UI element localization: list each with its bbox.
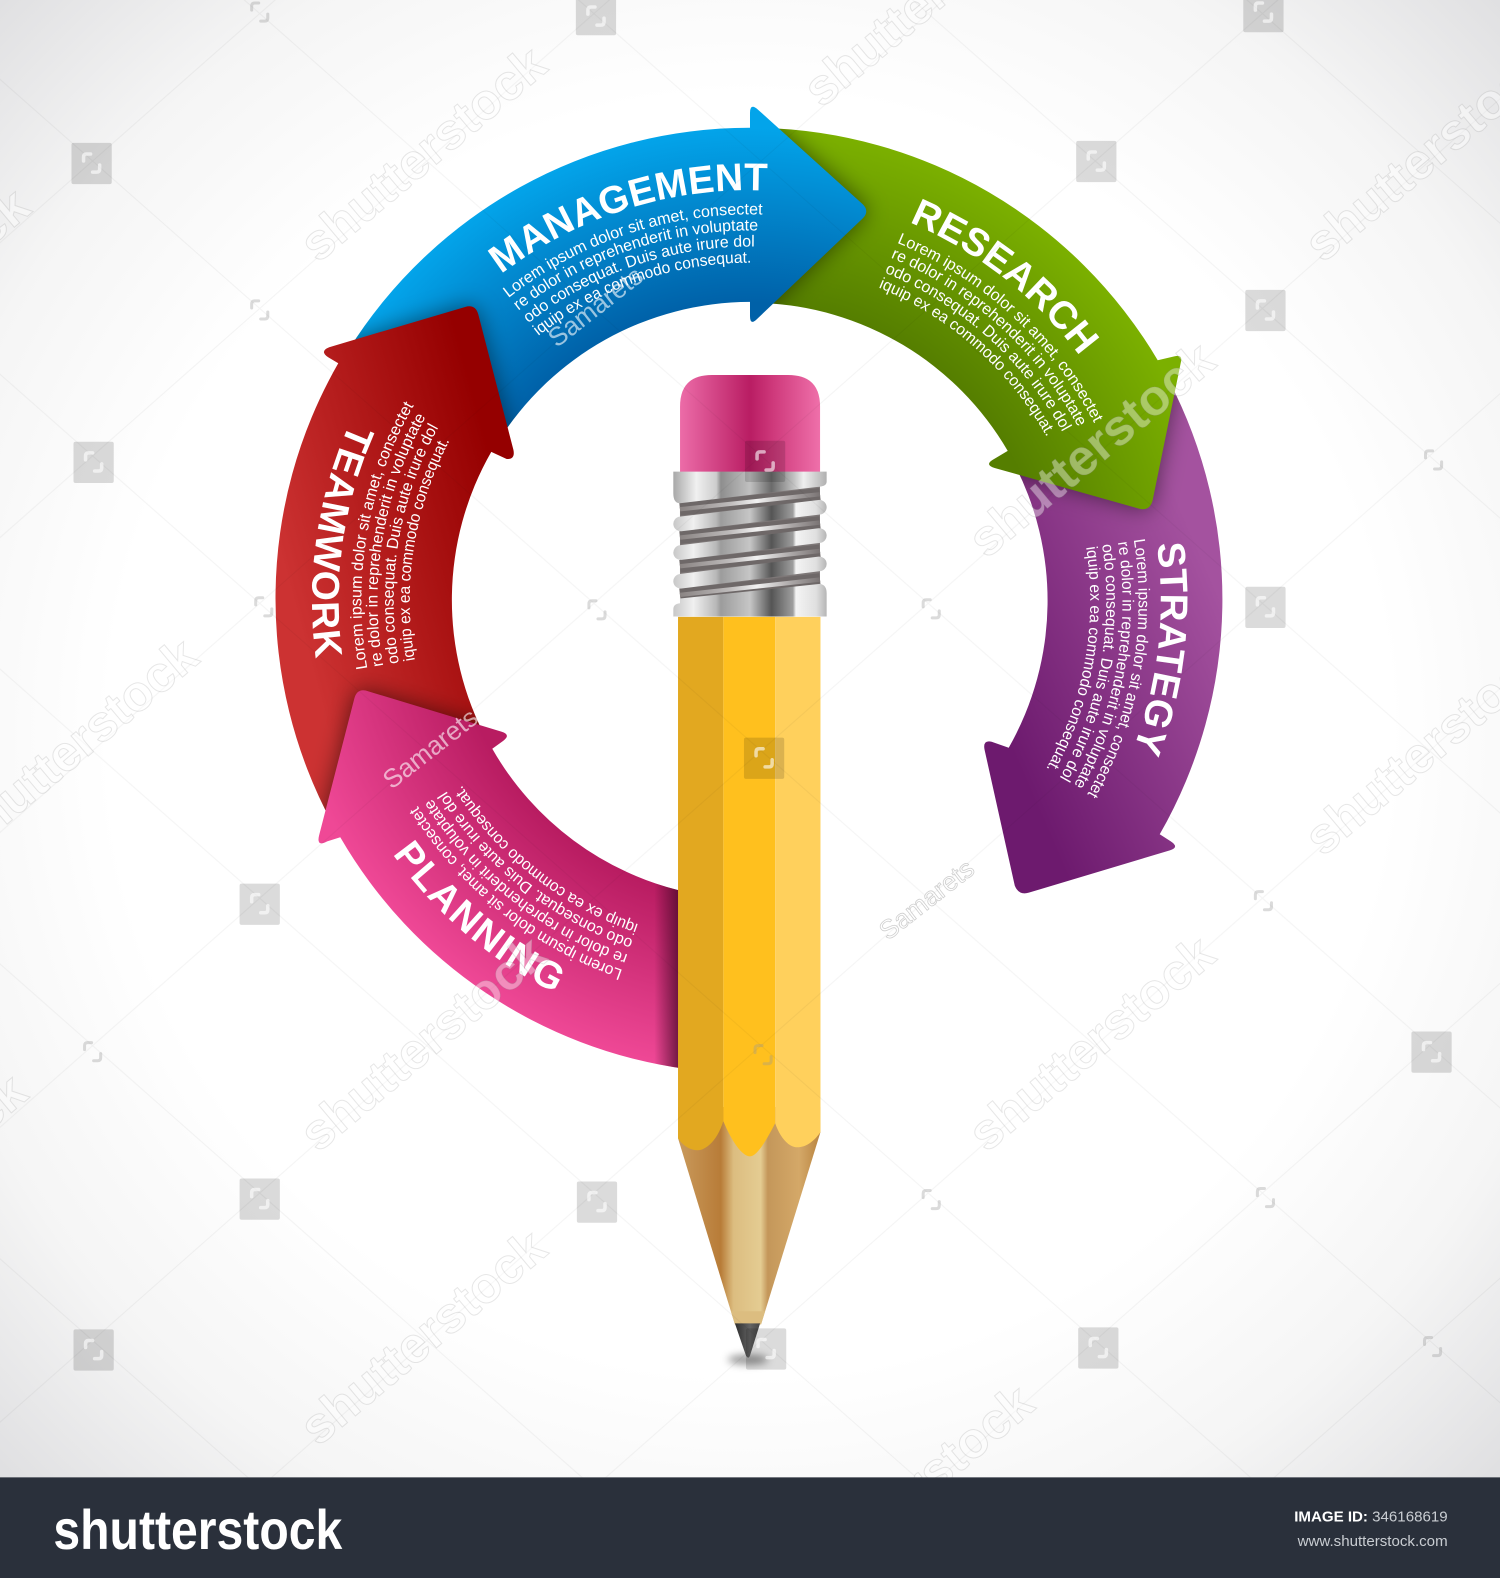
strategy body text xyxy=(1046,539,1150,798)
watermark overlay: shutterstock xyxy=(289,923,557,1162)
watermark overlay: shutterstock xyxy=(957,923,1226,1162)
planning body text: odo consequat. Duis aute irure dol xyxy=(437,792,632,947)
footer url: www.shutterstock.com xyxy=(1297,1533,1448,1550)
planning title: PLANNING xyxy=(394,840,562,989)
footer bar xyxy=(0,1477,1500,1578)
management body text: re dolor in reprehenderit in voluptate xyxy=(514,220,758,310)
graphite lead xyxy=(735,1323,760,1358)
pencil xyxy=(673,375,827,1365)
teamwork body text xyxy=(350,402,449,670)
management body text: odo consequat. Duis aute irure dol xyxy=(525,234,754,322)
footer logo: shutterstock xyxy=(53,1499,342,1561)
wood cone xyxy=(678,1107,820,1324)
planning body text: re dolor in reprehenderit in voluptate xyxy=(426,800,628,962)
strategy body text: odo consequat. Duis aute irure dol xyxy=(1060,544,1116,783)
teamwork body text: iquip ex ea commodo consequat. xyxy=(400,440,449,662)
teamwork body text: re dolor in reprehenderit in voluptate xyxy=(366,414,424,666)
research body text: re dolor in reprehenderit in voluptate xyxy=(892,250,1084,426)
watermark overlay: Samarets xyxy=(873,853,980,946)
watermark overlay: Samarets xyxy=(542,260,649,353)
teamwork body text: Lorem ipsum dolor sit amet, consectet xyxy=(350,402,414,670)
arrow: strategy xyxy=(984,392,1222,894)
arrow: teamwork xyxy=(276,306,514,810)
metal ferrule xyxy=(673,472,827,617)
research body text: Lorem ipsum dolor sit amet, consectet xyxy=(898,233,1102,423)
management title: MANAGEMENT xyxy=(488,164,768,272)
yellow body xyxy=(678,617,820,1156)
research title: RESEARCH xyxy=(912,198,1100,354)
arrow: planning xyxy=(318,690,678,1068)
management body text: iquip ex ea commodo consequat. xyxy=(532,252,750,336)
eraser xyxy=(680,375,820,472)
management body text: Lorem ipsum dolor sit amet, consectet xyxy=(502,204,762,298)
research body text: odo consequat. Duis aute irure dol xyxy=(886,266,1072,432)
watermark overlay: Samarets xyxy=(377,702,484,795)
teamwork title: TEAMWORK xyxy=(312,431,374,658)
footer image id: IMAGE ID: 346168619 xyxy=(1294,1509,1448,1526)
watermark overlay: shutterstock xyxy=(289,1217,557,1456)
strategy body text: iquip ex ea commodo consequat. xyxy=(1046,546,1101,769)
watermark overlay: shutterstock xyxy=(957,330,1226,568)
arrow: research xyxy=(773,128,1182,510)
planning body text: Lorem ipsum dolor sit amet, consectet xyxy=(410,806,622,980)
strategy title: STRATEGY xyxy=(1136,544,1188,758)
arrow: management xyxy=(355,106,866,428)
watermark squares xyxy=(71,0,1452,1371)
pencil tip shadow xyxy=(728,1355,768,1365)
teamwork body text: odo consequat. Duis aute irure dol xyxy=(385,422,438,664)
strategy body text: Lorem ipsum dolor sit amet, consectet xyxy=(1087,539,1150,798)
planning body text: iquip ex ea commodo consequat. xyxy=(456,786,638,935)
strategy body text: re dolor in reprehenderit in voluptate xyxy=(1075,542,1134,788)
watermark overlay: shutterstock xyxy=(289,34,557,272)
research body text: iquip ex ea commodo consequat. xyxy=(879,277,1053,436)
